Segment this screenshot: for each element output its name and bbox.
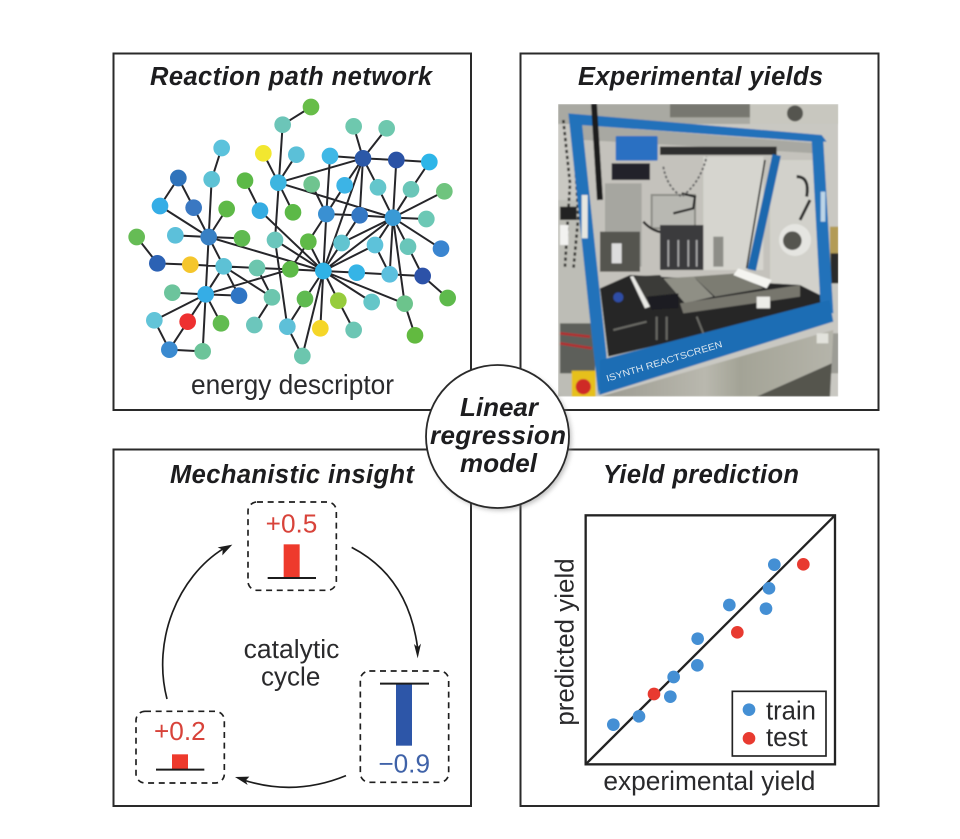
step box: -0.9: −0.9 xyxy=(378,749,430,779)
center badge: linear regression model: model xyxy=(460,448,538,478)
arrow: left to top xyxy=(163,545,232,699)
legend: test xyxy=(766,724,808,752)
label: catalytic cycle xyxy=(244,634,339,691)
arrow: right to left xyxy=(235,776,346,787)
center badge: linear regression model xyxy=(426,365,572,510)
caption: energy descriptor: energy descriptor xyxy=(191,369,394,400)
step box: +0.2 xyxy=(136,711,224,783)
photo: automated reaction screening robot xyxy=(558,104,838,397)
panel: reaction path network xyxy=(114,54,471,410)
step box: +0.5 xyxy=(248,502,336,590)
label: catalytic cycle: cycle xyxy=(261,661,320,691)
y-axis label: predicted yield xyxy=(549,558,579,726)
panel: mechanistic insight xyxy=(114,450,471,806)
panel: experimental yields xyxy=(520,54,878,410)
x-axis label: experimental yield xyxy=(603,766,815,796)
legend xyxy=(732,691,826,756)
step box: -0.9 xyxy=(360,671,449,782)
heading: mechanistic insight: Mechanistic insight xyxy=(170,461,416,489)
arrow: top to right xyxy=(352,547,421,658)
step box: +0.2: +0.2 xyxy=(154,716,206,746)
center badge: linear regression model: regression xyxy=(430,420,566,450)
heading: yield prediction: Yield prediction xyxy=(603,461,799,489)
step box: +0.5: +0.5 xyxy=(266,508,317,538)
label on machine: ISYNTH REACTSCREEN xyxy=(605,339,723,384)
heading: reaction path network: Reaction path network xyxy=(150,63,434,91)
label: catalytic cycle: catalytic xyxy=(244,634,339,664)
center badge: linear regression model: Linear xyxy=(460,392,540,422)
legend: train xyxy=(766,697,816,725)
heading: experimental yields: Experimental yields xyxy=(578,63,823,91)
panel: yield prediction xyxy=(520,450,878,806)
network graph xyxy=(128,99,456,364)
scatter plot xyxy=(549,515,835,796)
